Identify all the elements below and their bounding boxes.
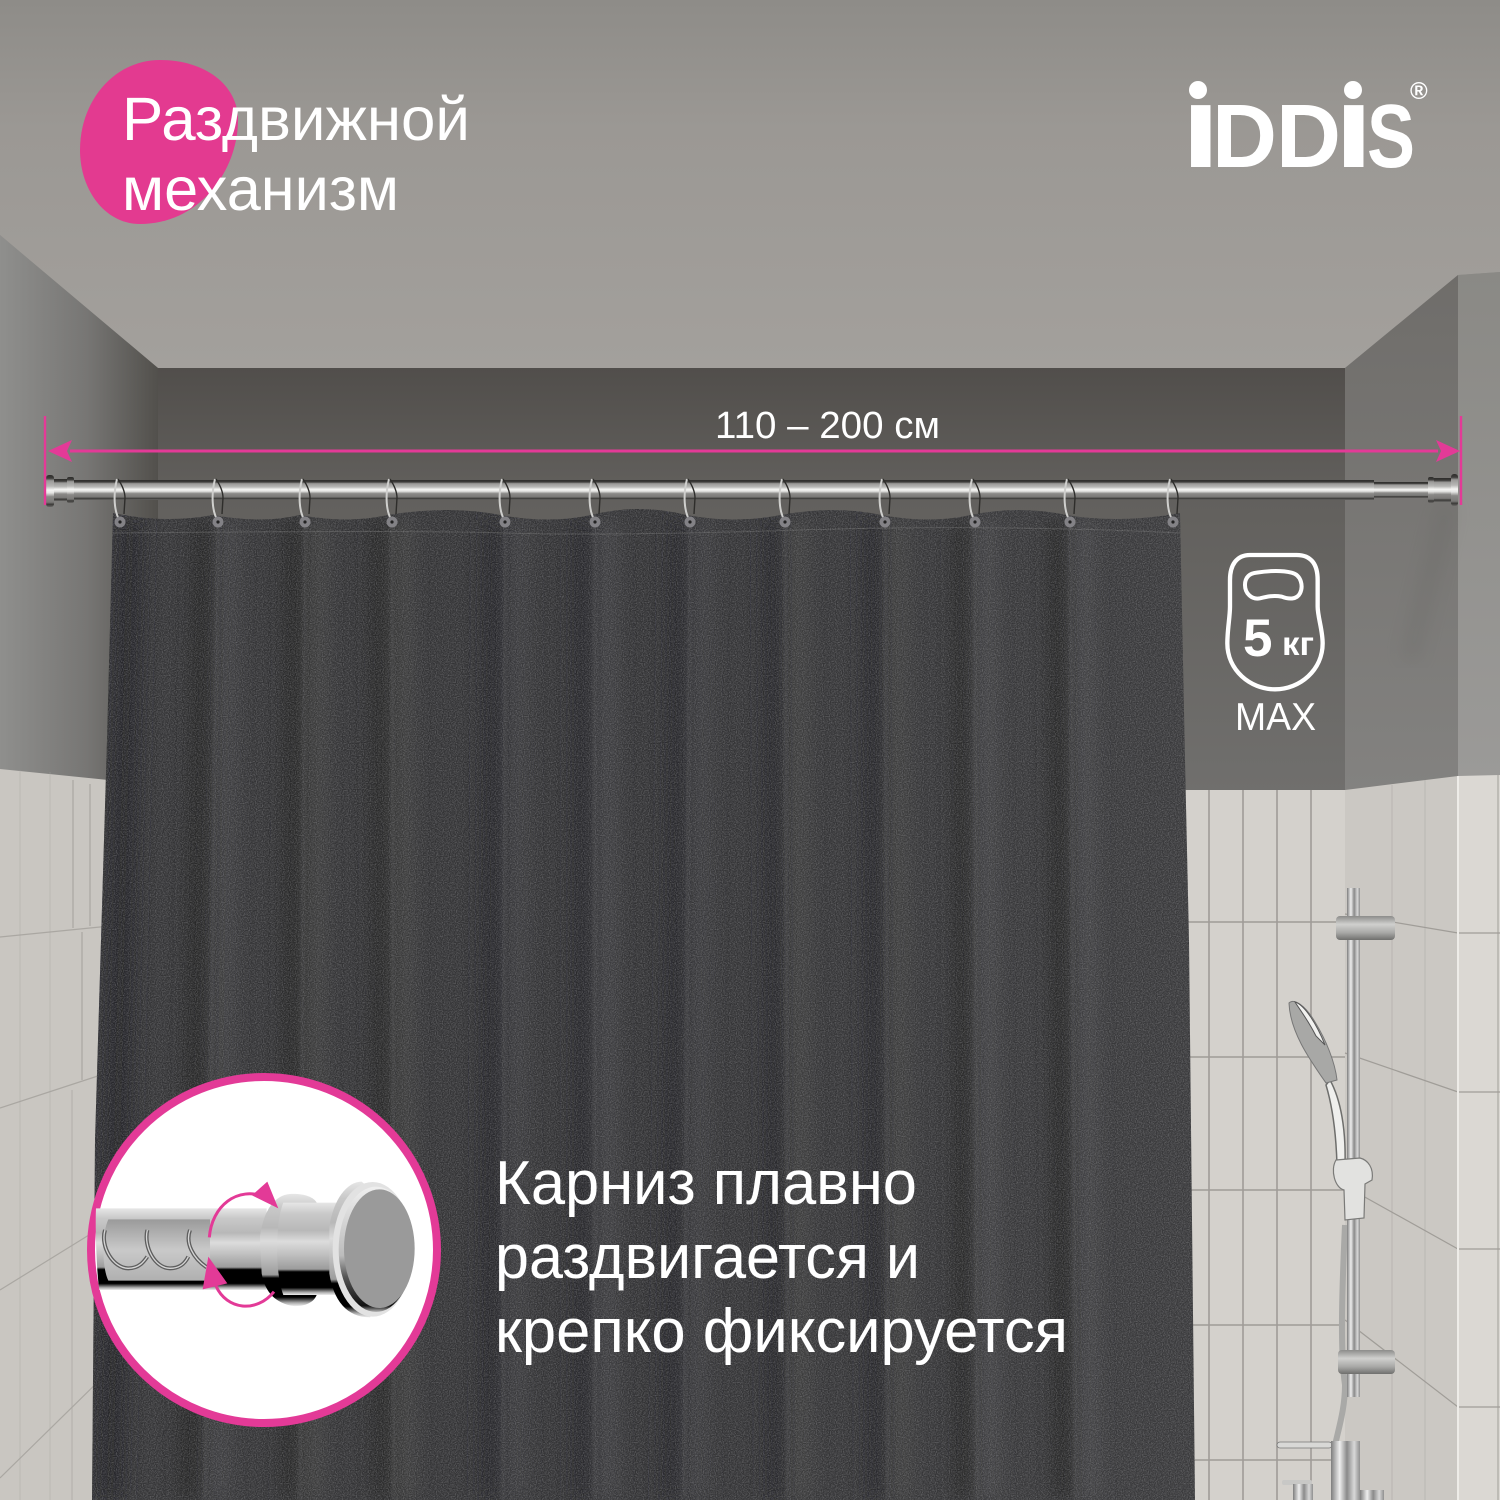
back wall tiles [1180, 790, 1345, 1500]
curtain folds [110, 520, 1088, 1500]
detail medallion [91, 1077, 437, 1423]
right end cap [1428, 474, 1458, 506]
pink blob [80, 60, 238, 224]
back wall [158, 368, 1345, 792]
shower handle [1326, 1080, 1345, 1165]
shower bar [1347, 888, 1360, 1397]
title badge: механизм [122, 155, 399, 223]
caption [495, 1149, 1068, 1366]
logo IDDIS: ® [1410, 78, 1428, 105]
shower hose [1334, 1225, 1345, 1450]
inner thin rod [1373, 482, 1431, 498]
curtain seam [113, 528, 1180, 534]
curtain texture [85, 500, 1205, 1500]
dimension arrow [45, 416, 1461, 505]
caption: крепко фиксируется [495, 1297, 1068, 1366]
right wall [1345, 275, 1458, 792]
weight value: 5 [1243, 609, 1272, 668]
shower head [1289, 1001, 1337, 1083]
rotation arrows [203, 1182, 278, 1306]
logo IDDIS: D [1276, 87, 1341, 187]
dimension label: 110 – 200 см [715, 405, 940, 447]
logo IDDIS: I [1335, 86, 1373, 187]
upper bracket [1336, 916, 1395, 940]
title text: Раздвижной [122, 85, 470, 153]
curtain creases [205, 525, 1076, 1500]
caption: раздвигается и [495, 1223, 920, 1292]
left end cap [46, 475, 74, 507]
logo IDDIS [1182, 78, 1428, 187]
curtain [85, 500, 1205, 1500]
collar [260, 1194, 317, 1306]
cap face [344, 1189, 415, 1308]
max label: MAX [1235, 696, 1316, 739]
main rod [72, 480, 1374, 500]
rod cutaway [103, 1219, 210, 1281]
logo IDDIS: D [1212, 87, 1277, 187]
curtain rings [114, 479, 1178, 528]
wall shadow under rod end [1410, 505, 1447, 660]
curtain rod [46, 474, 1458, 528]
ceiling [0, 0, 1500, 368]
weight icon [1227, 555, 1323, 739]
left wall tiles [0, 769, 158, 1500]
mixer [1277, 1441, 1384, 1500]
sleeve [277, 1203, 337, 1295]
rod tube [96, 1208, 267, 1290]
mechanism illustration [96, 1182, 415, 1317]
weight unit: кг [1282, 625, 1314, 662]
title badge [80, 60, 470, 224]
right wall tiles [1345, 775, 1500, 1500]
left wall [0, 235, 158, 790]
end cap [329, 1182, 387, 1317]
shower slider [1333, 1158, 1372, 1220]
right pier [1458, 272, 1500, 778]
caption: Карниз плавно [495, 1149, 917, 1218]
curtain fabric [85, 500, 1205, 1500]
shower set [1277, 888, 1395, 1500]
medallion circle [91, 1077, 437, 1423]
spring [104, 1230, 207, 1268]
logo IDDIS: I [1182, 86, 1220, 187]
logo IDDIS: S [1367, 86, 1415, 187]
kettlebell [1227, 555, 1323, 689]
lower bracket [1338, 1350, 1395, 1374]
